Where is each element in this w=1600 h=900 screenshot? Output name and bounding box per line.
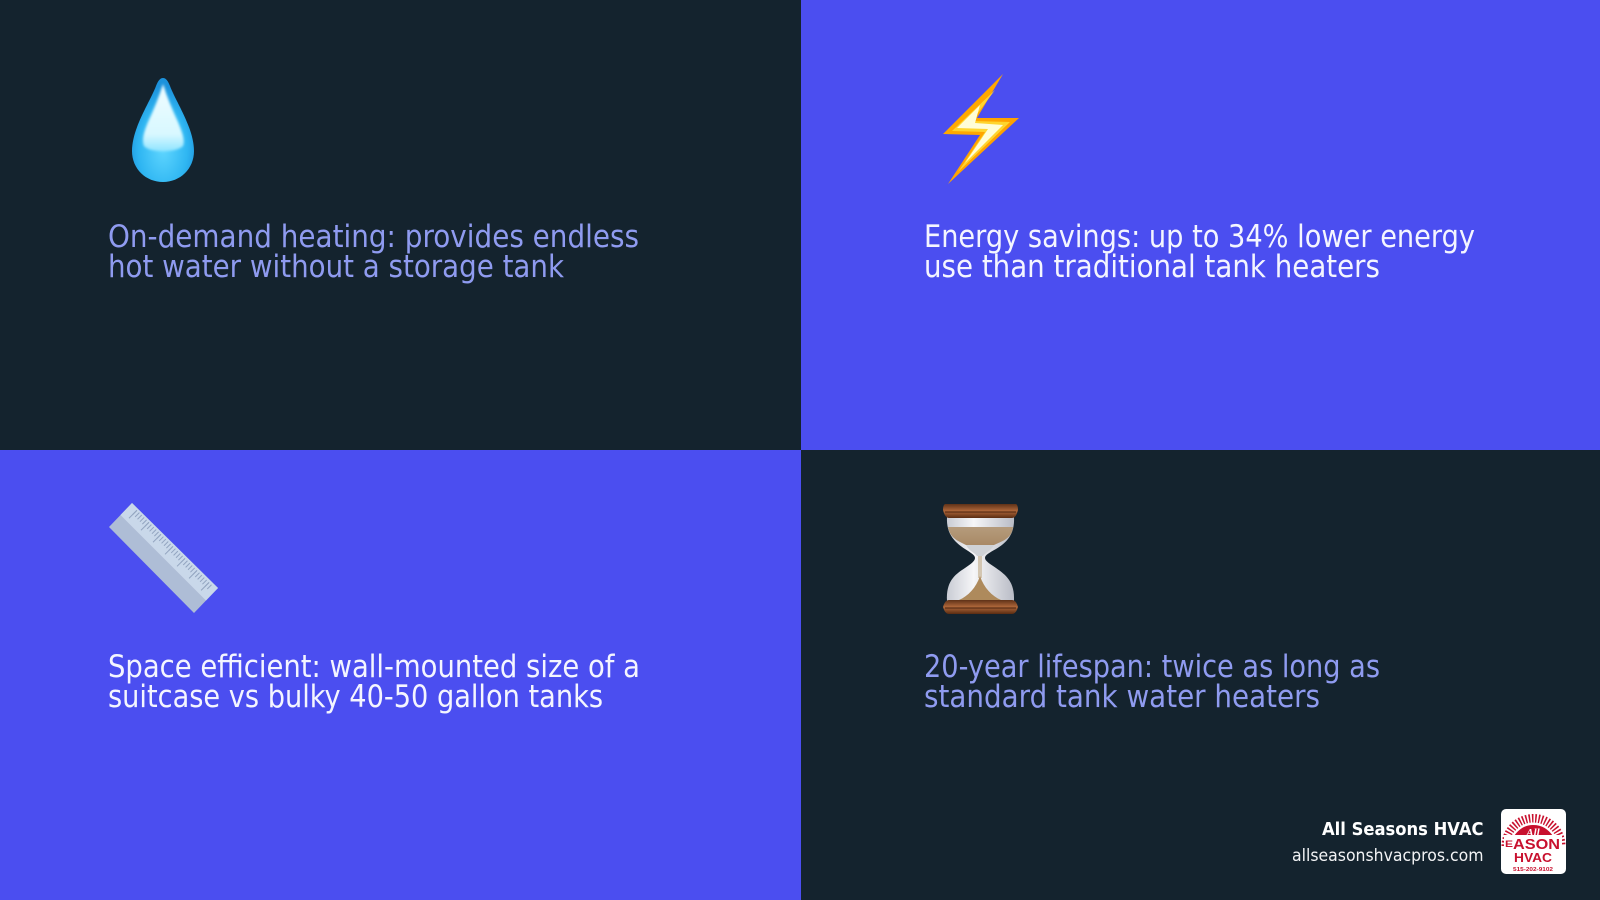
panel: space efficient xyxy=(0,450,801,900)
panel: on-demand heating xyxy=(0,0,801,450)
panel: 20-year lifespan xyxy=(801,450,1600,900)
logo: E xyxy=(1505,839,1513,849)
logo: 515-202-9102 xyxy=(1513,867,1553,873)
text: space efficient: Space efficient: wall-mounted size of a xyxy=(108,649,640,685)
text: on-demand heating: hot water without a storage tank xyxy=(108,249,564,285)
brand name: All Seasons HVAC xyxy=(1322,819,1484,840)
logo xyxy=(1501,809,1566,874)
logo: ASON xyxy=(1513,836,1560,853)
icon: lightning bolt xyxy=(943,74,1019,184)
brand url: allseasonshvacpros.com xyxy=(1292,846,1484,866)
logo: HVAC xyxy=(1514,850,1553,865)
logo: All xyxy=(1525,827,1541,839)
text: on-demand heating: On-demand heating: provides endless xyxy=(108,219,639,255)
panel: energy savings xyxy=(801,0,1600,450)
text: space efficient: suitcase vs bulky 40-50 gallon tanks xyxy=(108,679,603,715)
text: energy savings: use than traditional tank heaters xyxy=(924,249,1380,285)
icon: hourglass xyxy=(943,504,1018,614)
text: 20-year lifespan: standard tank water heaters xyxy=(924,679,1320,715)
text: 20-year lifespan: 20-year lifespan: twice as long as xyxy=(924,649,1380,685)
brand block xyxy=(1292,809,1566,874)
text: energy savings: Energy savings: up to 34% lower energy xyxy=(924,219,1475,255)
icon: ruler xyxy=(109,503,218,613)
icon: water drop xyxy=(132,78,194,182)
